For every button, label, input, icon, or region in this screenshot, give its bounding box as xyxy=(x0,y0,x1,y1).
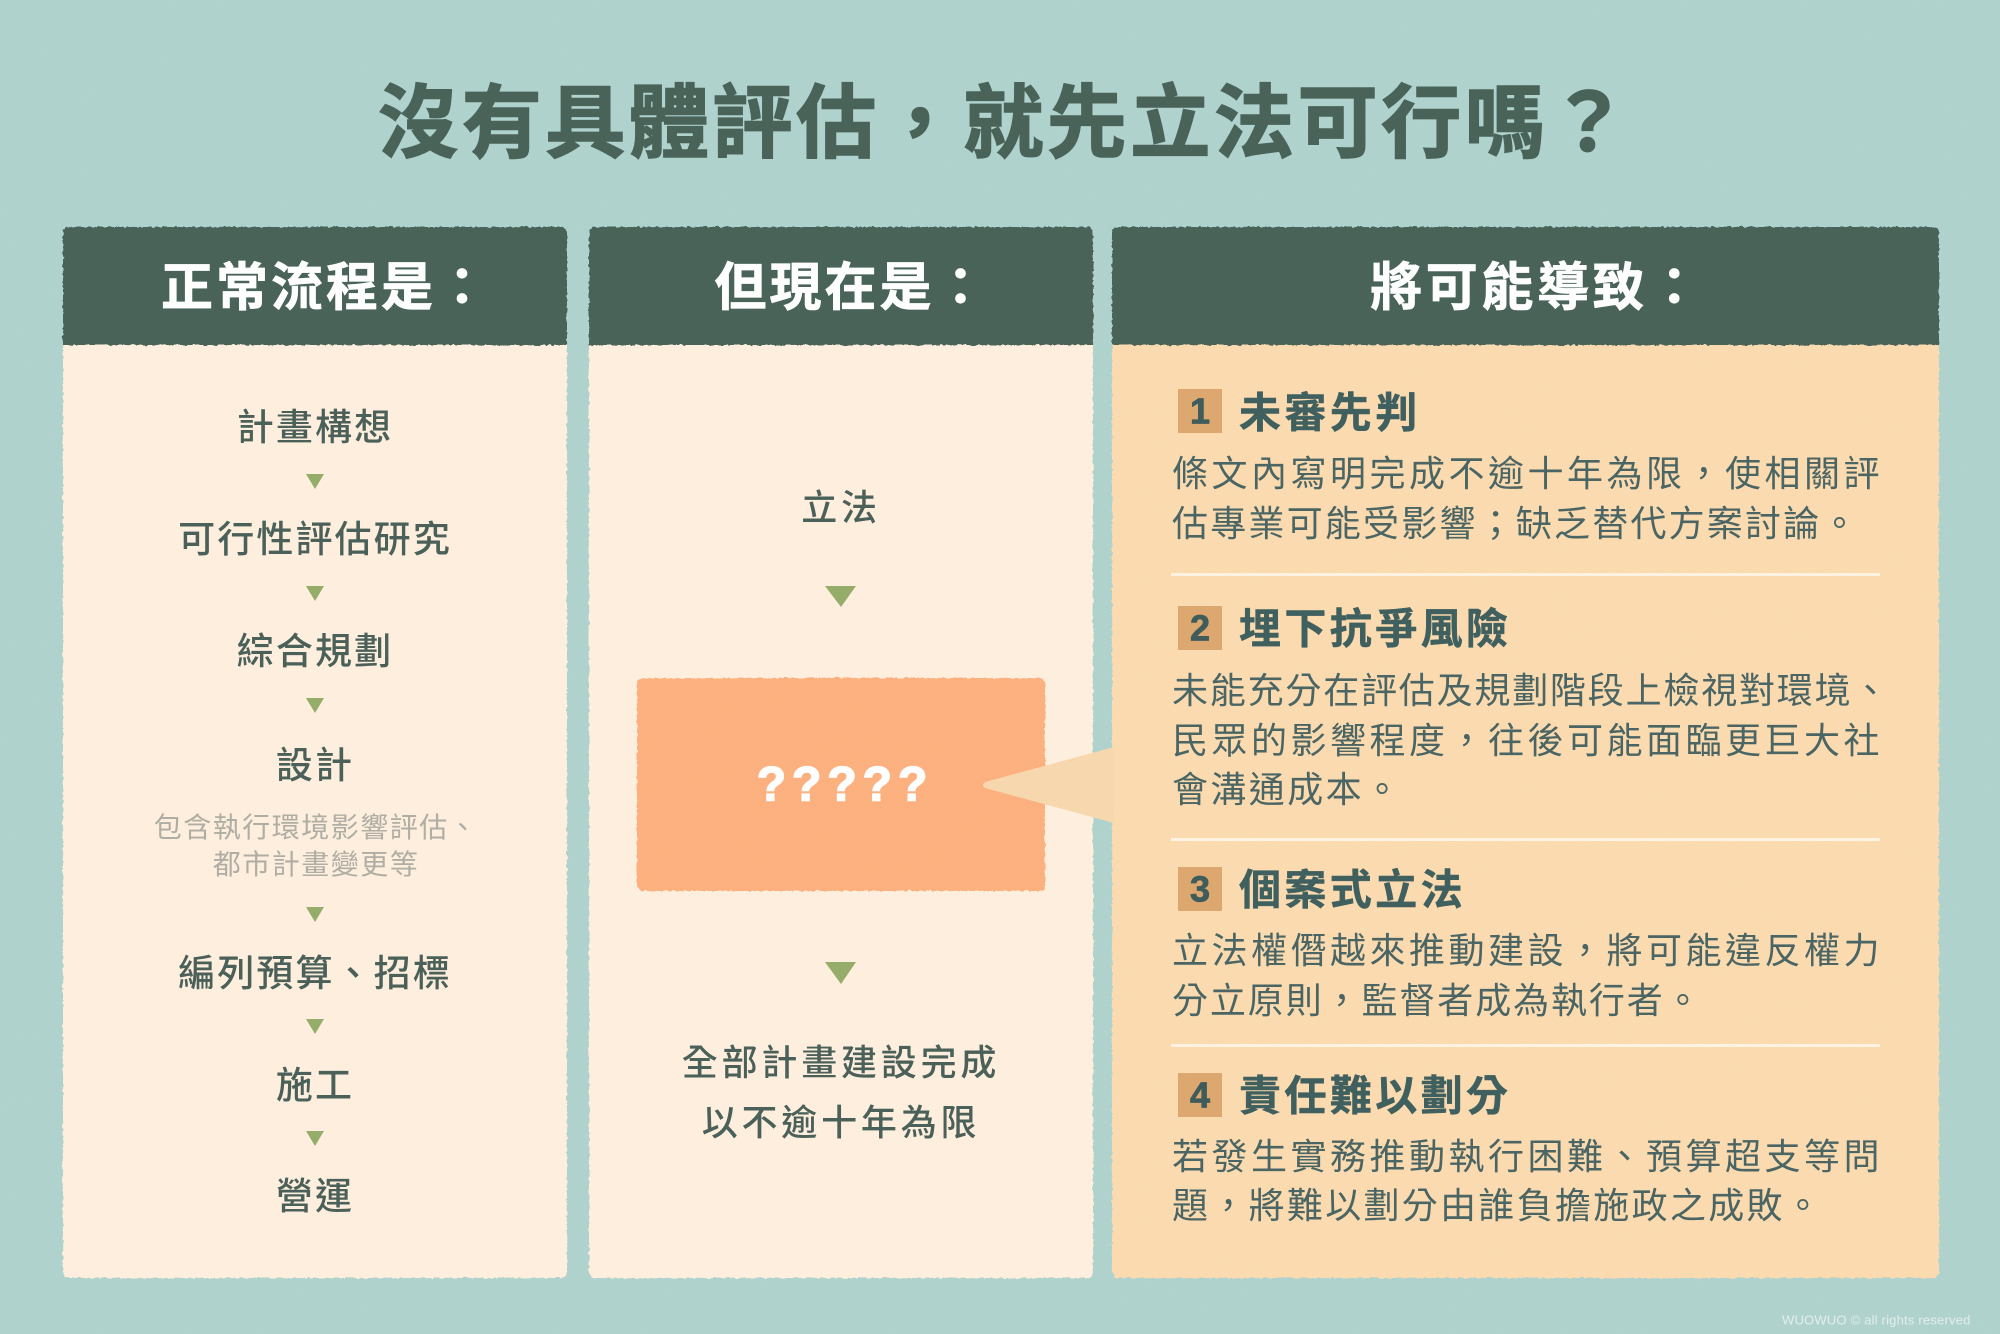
completion text: 以不逾十年為限 xyxy=(702,1094,980,1146)
arrow xyxy=(306,474,324,489)
panel body: current process xyxy=(589,300,1093,1278)
item 3: 立法權僭越來推動建設，將可能違反權力 xyxy=(1172,922,1883,974)
panel: current process xyxy=(589,227,1093,1278)
arrow xyxy=(306,698,324,713)
panel: consequences xyxy=(983,227,1939,1278)
item 2: 未能充分在評估及規劃階段上檢視對環境、 xyxy=(1172,662,1890,714)
title: 沒有具體評估，就先立法可行嗎？ xyxy=(378,59,1632,175)
panel body: consequences xyxy=(1112,300,1939,1278)
step: budget: 編列預算、招標 xyxy=(178,943,452,997)
item 2 xyxy=(1172,596,1890,813)
header bar: normal process xyxy=(63,227,567,345)
item 4: 4 xyxy=(1190,1074,1210,1116)
step: construction: 施工 xyxy=(276,1055,354,1109)
step: legislation: 立法 xyxy=(801,479,881,531)
item 3: 3 xyxy=(1190,868,1210,910)
design note: 包含執行環境影響評估、 xyxy=(154,806,478,846)
item 4: 題，將難以劃分由誰負擔施政之成敗。 xyxy=(1172,1177,1823,1229)
callout pointer xyxy=(983,747,1114,823)
header bar: consequences xyxy=(1112,227,1939,345)
step: planning: 綜合規劃 xyxy=(237,621,393,675)
item 4: 若發生實務推動執行困難、預算超支等問 xyxy=(1172,1128,1883,1180)
panel body: normal process xyxy=(63,300,567,1278)
item 1 xyxy=(1172,380,1883,547)
header bar: current process xyxy=(589,227,1093,345)
step: feasibility: 可行性評估研究 xyxy=(178,509,452,563)
step: concept: 計畫構想 xyxy=(237,397,393,451)
item 2: 2 xyxy=(1190,608,1210,648)
panel: normal process xyxy=(63,227,567,1278)
item 2: 會溝通成本。 xyxy=(1172,761,1402,813)
design note xyxy=(154,806,478,883)
completion text: 全部計畫建設完成 xyxy=(682,1034,1000,1086)
item 3 xyxy=(1172,856,1883,1024)
item 2: 埋下抗爭風險 xyxy=(1239,596,1511,656)
item 3: 個案式立法 xyxy=(1239,856,1466,918)
item 3: 分立原則，監督者成為執行者。 xyxy=(1172,972,1703,1024)
completion text xyxy=(682,1034,1000,1146)
heading: current process: 但現在是： xyxy=(714,246,990,320)
item 4 xyxy=(1172,1062,1883,1229)
unknown box xyxy=(637,678,1045,891)
heading: normal process: 正常流程是： xyxy=(161,246,491,320)
design note: 都市計畫變更等 xyxy=(213,843,419,883)
arrow xyxy=(306,586,324,601)
arrow xyxy=(306,1019,324,1034)
arrow xyxy=(306,1131,324,1146)
item 2: 民眾的影響程度，往後可能面臨更巨大社 xyxy=(1172,712,1883,764)
item 1: 估專業可能受影響；缺乏替代方案討論。 xyxy=(1172,495,1860,547)
arrow xyxy=(825,962,856,984)
unknown box: ????? xyxy=(757,758,933,812)
item 1: 未審先判 xyxy=(1239,380,1421,440)
copyright: WUOWUO © all rights reserved xyxy=(1782,1312,1971,1328)
item 4: 責任難以劃分 xyxy=(1239,1062,1511,1124)
step: operation: 營運 xyxy=(276,1166,354,1220)
arrow xyxy=(306,907,324,922)
item 1: 1 xyxy=(1190,390,1210,432)
heading: consequences: 將可能導致： xyxy=(1370,246,1704,320)
step: design: 設計 xyxy=(276,735,354,789)
item 1: 條文內寫明完成不逾十年為限，使相關評 xyxy=(1172,445,1883,497)
arrow xyxy=(825,586,856,607)
